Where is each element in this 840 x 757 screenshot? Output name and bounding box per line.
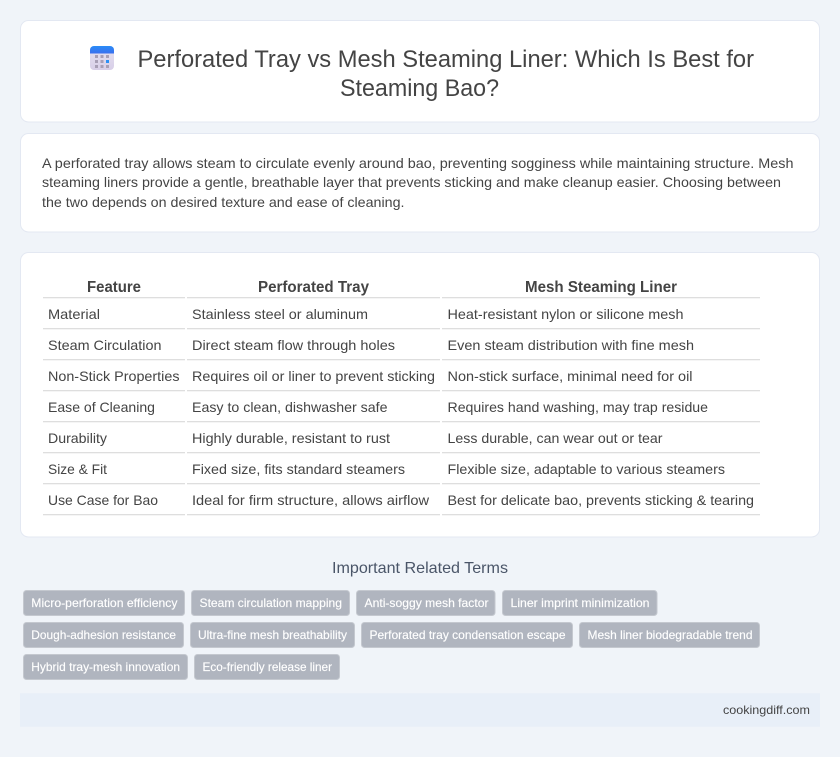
heading: important related terms: Important Related Terms — [332, 560, 508, 577]
tag: anti-soggy mesh factor: Anti-soggy mesh factor — [364, 596, 489, 610]
row: ease of cleaning: Easy to clean, dishwasher safe — [192, 399, 388, 415]
table header row: Feature — [87, 279, 141, 296]
intro paragraph: A perforated tray allows steam to circulate evenly around bao, preventing sogginess while maintaining structure. Mesh — [42, 155, 794, 171]
row: size and fit: Size & Fit — [48, 461, 107, 477]
panel: title header — [20, 20, 820, 122]
row: use case for bao: Best for delicate bao, prevents sticking & tearing — [448, 492, 754, 508]
intro paragraph: the two depends on desired texture and ease of cleaning. — [42, 194, 404, 210]
row: size and fit: Fixed size, fits standard steamers — [192, 461, 405, 477]
tag: steam circulation mapping: Steam circulation mapping — [200, 596, 342, 610]
tag: liner imprint minimization — [502, 590, 657, 616]
tag: ultra-fine mesh breathability — [190, 622, 354, 648]
icon: calendar — [90, 46, 114, 70]
row: material: Stainless steel or aluminum — [192, 306, 368, 322]
row: non-stick properties: Requires oil or liner to prevent sticking — [192, 368, 435, 384]
title — [138, 46, 754, 102]
tag: steam circulation mapping — [192, 590, 350, 616]
row: size and fit: Flexible size, adaptable to various steamers — [448, 461, 725, 477]
row: ease of cleaning: Ease of Cleaning — [48, 399, 155, 415]
title: Steaming Bao? — [340, 75, 499, 102]
footer: cookingdiff.com — [723, 703, 810, 717]
row: material: Material — [48, 306, 100, 322]
tag: anti-soggy mesh factor — [356, 590, 495, 616]
intro paragraph — [42, 155, 794, 210]
tag: dough-adhesion resistance — [24, 622, 184, 648]
tag: micro-perforation efficiency — [24, 590, 184, 616]
tag: mesh liner biodegradable trend: Mesh liner biodegradable trend — [588, 628, 752, 642]
tag: eco-friendly release liner — [194, 654, 340, 680]
row: use case for bao — [48, 492, 754, 508]
panel: comparison table — [20, 252, 820, 537]
row: steam circulation: Direct steam flow through holes — [192, 337, 395, 353]
tag: liner imprint minimization: Liner imprint minimization — [510, 596, 650, 610]
row: non-stick properties: Non-stick surface, minimal need for oil — [448, 368, 692, 384]
row: size and fit — [48, 461, 725, 477]
row: use case for bao: Use Case for Bao — [48, 492, 158, 508]
row: non-stick properties: Non-Stick Properties — [48, 368, 180, 384]
row: steam circulation — [48, 337, 694, 353]
tag: hybrid tray-mesh innovation: Hybrid tray-mesh innovation — [31, 660, 180, 674]
intro paragraph: steaming liners provide a gentle, breathable layer that prevents sticking and make cleanup easier. Choosing between — [42, 174, 781, 190]
row: steam circulation: Steam Circulation — [48, 337, 162, 353]
panel: introduction — [20, 134, 820, 232]
row: use case for bao: Ideal for firm structure, allows airflow — [192, 492, 430, 508]
tag: eco-friendly release liner: Eco-friendly release liner — [202, 660, 332, 674]
row: durability: Highly durable, resistant to rust — [192, 430, 390, 446]
row: material: Heat-resistant nylon or silicone mesh — [448, 306, 684, 322]
title: Perforated Tray vs Mesh Steaming Liner: Which Is Best for — [138, 46, 754, 73]
row: ease of cleaning — [48, 399, 708, 415]
row: durability: Less durable, can wear out or tear — [448, 430, 663, 446]
tag: mesh liner biodegradable trend — [580, 622, 760, 648]
row: durability — [48, 430, 663, 446]
tag: perforated tray condensation escape — [362, 622, 572, 648]
row: non-stick properties — [48, 368, 692, 384]
row: steam circulation: Even steam distribution with fine mesh — [448, 337, 694, 353]
footer — [20, 693, 820, 727]
tag: micro-perforation efficiency: Micro-perforation efficiency — [31, 596, 177, 610]
table header row — [87, 279, 677, 296]
row: material — [48, 306, 684, 322]
tag: hybrid tray-mesh innovation — [24, 654, 188, 680]
tag: ultra-fine mesh breathability: Ultra-fine mesh breathability — [198, 628, 347, 642]
row: durability: Durability — [48, 430, 107, 446]
table header row: Perforated Tray — [258, 279, 369, 296]
tag: perforated tray condensation escape: Perforated tray condensation escape — [370, 628, 566, 642]
table header row: Mesh Steaming Liner — [525, 279, 677, 296]
tag: dough-adhesion resistance: Dough-adhesion resistance — [31, 628, 176, 642]
row: ease of cleaning: Requires hand washing, may trap residue — [448, 399, 708, 415]
panel: related terms — [24, 560, 760, 680]
